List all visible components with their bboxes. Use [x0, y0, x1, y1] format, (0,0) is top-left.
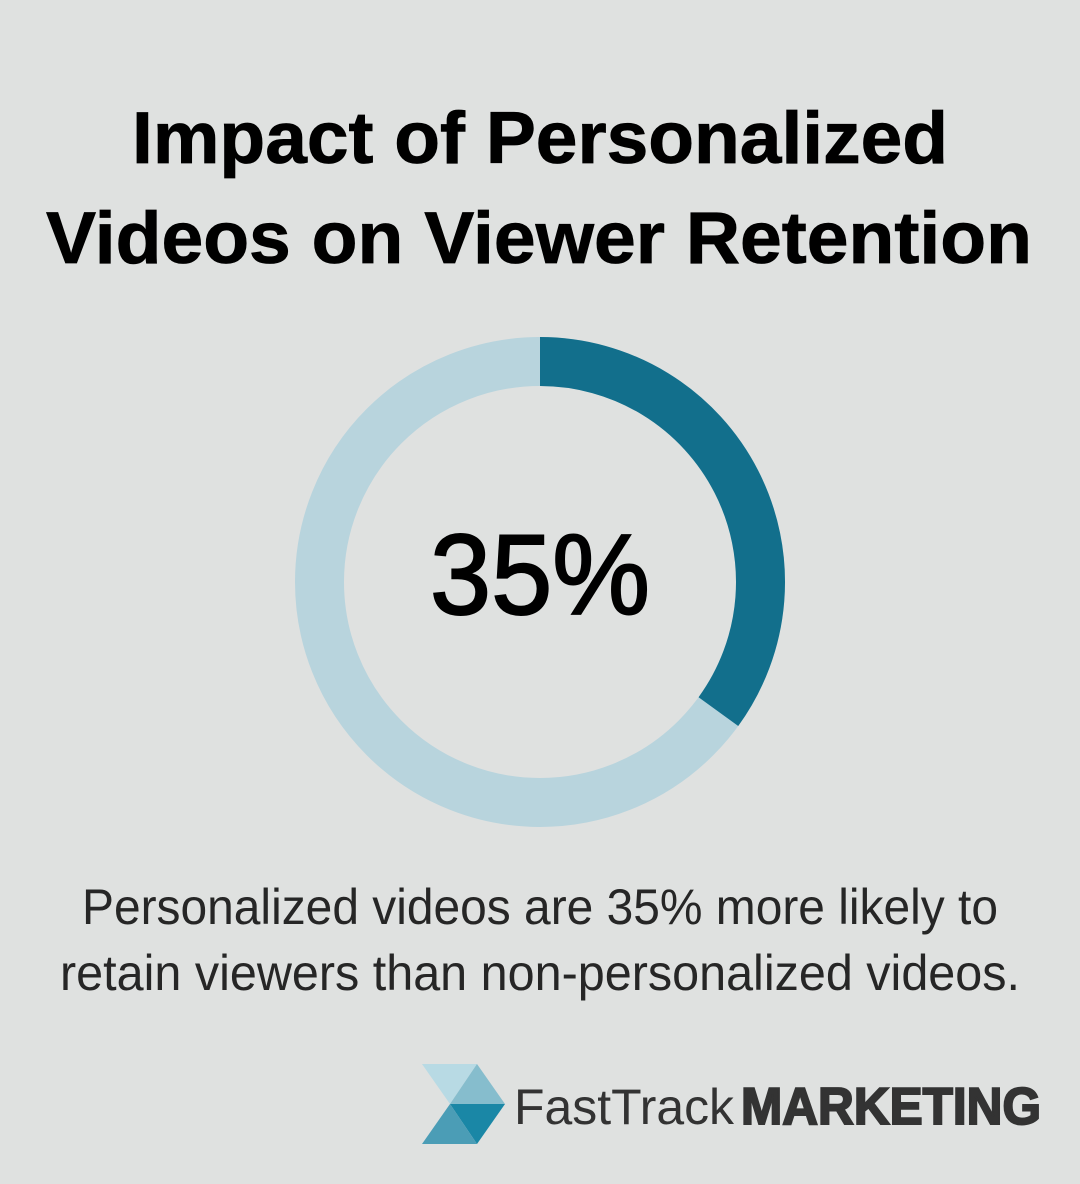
donut track	[320, 362, 760, 802]
logo wordmark: FastTrack	[514, 1079, 735, 1135]
logo icon	[422, 1064, 505, 1144]
logo wordmark: MARKETING	[741, 1078, 1041, 1136]
donut value arc	[540, 362, 761, 712]
donut chart: 35%	[320, 362, 761, 802]
logo: FastTrack Marketing	[422, 1064, 1041, 1144]
title: Impact of Personalized	[132, 98, 948, 179]
title: Videos on Viewer Retention	[46, 198, 1032, 279]
logo wordmark	[514, 1078, 1041, 1136]
description text	[60, 879, 1020, 1001]
description text: Personalized videos are 35% more likely to	[82, 879, 998, 935]
title	[46, 98, 1032, 279]
description text: retain viewers than non-personalized videos.	[60, 945, 1020, 1001]
center value: 35%	[430, 512, 650, 639]
